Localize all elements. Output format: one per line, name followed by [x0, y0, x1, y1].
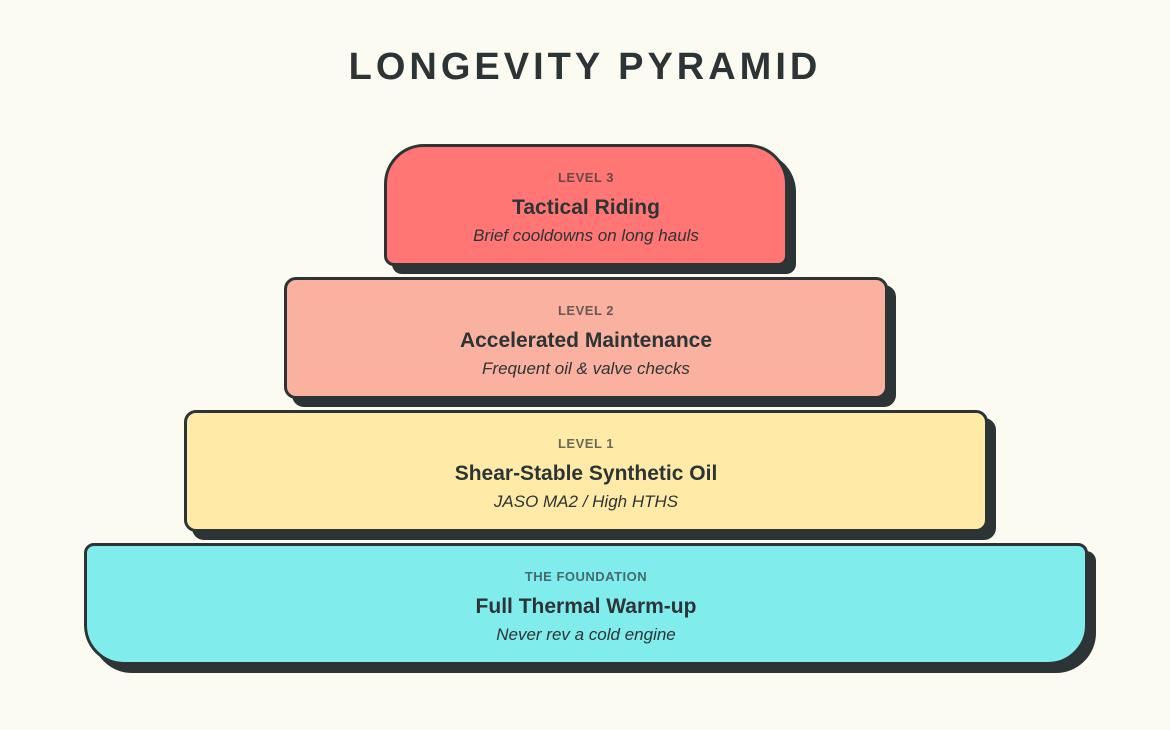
tier: level 2: Accelerated Maintenance	[460, 329, 712, 352]
tier: foundation: Full Thermal Warm-up	[476, 595, 696, 618]
tier: foundation: Never rev a cold engine	[496, 625, 676, 644]
tier: level 3: LEVEL 3	[558, 170, 614, 185]
tier: foundation: THE FOUNDATION	[525, 569, 647, 584]
tier: level 3: Brief cooldowns on long hauls	[473, 226, 699, 245]
tier: level 3	[384, 144, 788, 266]
tier: level 2	[284, 277, 888, 399]
tier: level 2: Frequent oil & valve checks	[482, 359, 690, 378]
tier: level 1: Shear-Stable Synthetic Oil	[455, 462, 717, 485]
tier: level 1: LEVEL 1	[558, 436, 614, 451]
tier: foundation	[84, 543, 1088, 665]
title: LONGEVITY PYRAMID	[349, 46, 821, 88]
tier: level 2: LEVEL 2	[558, 303, 614, 318]
tier: level 1	[184, 410, 988, 532]
tier: level 3: Tactical Riding	[512, 196, 660, 219]
tier: level 1: JASO MA2 / High HTHS	[494, 492, 678, 511]
